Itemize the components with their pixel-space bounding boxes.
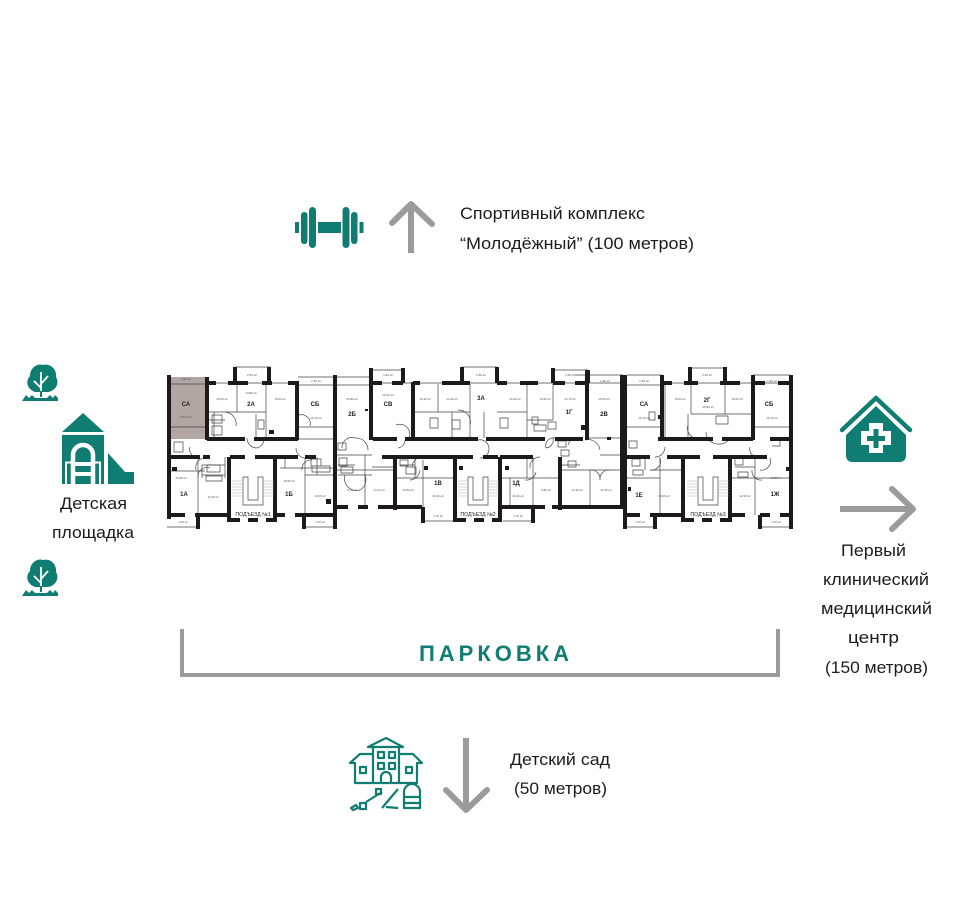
area labels: 16,10 м²	[310, 416, 322, 420]
area labels: 16,10 м²	[766, 416, 778, 420]
thick walls	[167, 367, 793, 529]
apartment labels: СВ	[384, 402, 393, 408]
area labels: 2,59 м²	[702, 373, 712, 377]
area labels: 16,40 м²	[509, 397, 521, 401]
area labels: 16,40 м²	[512, 494, 524, 498]
area labels	[175, 373, 782, 524]
area labels: 11,50 м²	[739, 494, 751, 498]
area labels: 14,10 м²	[373, 488, 385, 492]
area labels: 1,60 м²	[635, 520, 645, 524]
text: kindergarten: (50 метров)	[514, 779, 607, 798]
apartment labels: 1В	[434, 481, 443, 487]
arrow: right	[840, 489, 913, 529]
area labels: 2,39 м²	[311, 379, 321, 383]
icon: kindergarten	[350, 738, 422, 810]
area labels: 16,50 м²	[175, 476, 187, 480]
area labels: 1,60 м²	[383, 373, 393, 377]
bathrooms	[174, 412, 780, 481]
area labels: 16,50 м²	[598, 397, 610, 401]
apartment labels	[180, 396, 780, 499]
area labels: 2,59 м²	[247, 373, 257, 377]
icon: playground	[62, 413, 134, 484]
area labels: 10,60 м²	[658, 494, 670, 498]
area labels: 16,00 м²	[731, 397, 743, 401]
text: kindergarten	[510, 750, 610, 798]
label: playground: площадка	[52, 523, 135, 542]
area labels: 1,90 м²	[600, 379, 610, 383]
apartment labels: 1Б	[285, 492, 294, 498]
area labels: 19,00 м²	[216, 397, 228, 401]
area labels: 1,60 м²	[771, 520, 781, 524]
area labels: 1,60 м²	[315, 520, 325, 524]
floor plan	[167, 367, 793, 529]
icon: clinic	[842, 398, 910, 462]
apartment labels: 1Е	[635, 493, 643, 499]
area labels: 1,60 м²	[178, 520, 188, 524]
label: playground: Детская	[60, 494, 127, 513]
area labels: 16,30 м²	[432, 494, 444, 498]
apartment labels: 2А	[247, 402, 256, 408]
text: sports complex: Спортивный комплекс	[460, 204, 646, 223]
stairwell 2	[458, 477, 499, 505]
icon: tree bottom	[22, 560, 58, 596]
area labels: 20,80 м²	[346, 397, 358, 401]
apartment labels: 3А	[477, 396, 486, 402]
arrow: up	[392, 204, 432, 253]
text: clinic: медицинский	[821, 599, 932, 618]
apartment labels: СА	[182, 402, 191, 408]
icon: tree top	[22, 365, 58, 401]
area labels: 16,10 м²	[638, 416, 650, 420]
entrance labels: ПОДЪЕЗД №1	[235, 512, 271, 518]
apartment labels: СА	[640, 402, 649, 408]
area labels: 11,50 м²	[600, 488, 612, 492]
entrance labels: ПОДЪЕЗД №2	[460, 512, 496, 518]
apartment labels: 1Ж	[771, 492, 780, 498]
area labels: 16,50 м²	[770, 476, 782, 480]
entrance labels: ПОДЪЕЗД №3	[690, 512, 726, 518]
area labels: 11,50 м²	[207, 495, 219, 499]
text: kindergarten: Детский сад	[510, 750, 610, 769]
arrow: down	[446, 738, 487, 810]
area labels: 10,80 м²	[245, 391, 257, 395]
thin interior lines	[167, 367, 793, 527]
area labels: 19,00 м²	[674, 397, 686, 401]
text: clinic: клинический	[823, 570, 929, 589]
area labels: 9,10 м²	[347, 488, 357, 492]
text: sports complex	[460, 204, 694, 253]
area labels: 10,80 м²	[702, 405, 714, 409]
area labels: 1,70 м²	[433, 514, 443, 518]
area labels: 2,00 м²	[181, 377, 191, 381]
area labels: 12,70 м²	[564, 397, 576, 401]
center party wall	[620, 375, 627, 529]
area labels: 16,50 м²	[283, 479, 295, 483]
stairwell 3	[687, 477, 729, 505]
apartment labels: СБ	[765, 402, 774, 408]
area labels: 13,80 м²	[402, 488, 414, 492]
apartment highlight	[171, 377, 205, 439]
area labels: 14,40 м²	[446, 397, 458, 401]
apartment labels: 1Г	[566, 410, 573, 416]
text: clinic	[821, 541, 932, 677]
label: playground	[52, 494, 135, 542]
area labels: 2,39 м²	[639, 379, 649, 383]
parking bracket	[182, 629, 778, 675]
text: clinic: центр	[848, 628, 899, 647]
apartment labels: 2Г	[704, 398, 711, 404]
area labels: 1,70 м²	[513, 514, 523, 518]
stairwell 1	[232, 477, 274, 505]
area labels: 2,59 м²	[476, 373, 486, 377]
small dark wall blocks	[172, 409, 790, 504]
area labels: 16,00 м²	[382, 393, 394, 397]
entrance labels	[235, 512, 726, 518]
apartment labels: 2В	[600, 412, 609, 418]
area labels: 14,80 м²	[539, 397, 551, 401]
icon: dumbbell	[295, 207, 364, 248]
apartment labels: 1Д	[512, 481, 521, 487]
door arcs	[190, 410, 771, 491]
area labels: 1,80 м²	[565, 373, 575, 377]
apartment labels: 2Б	[348, 412, 357, 418]
apartment labels: СБ	[311, 402, 320, 408]
area labels: 16,00 м²	[274, 397, 286, 401]
area labels: 16,70 м²	[180, 415, 192, 419]
label: parking: ПАРКОВКА	[419, 641, 569, 666]
text: clinic: (150 метров)	[825, 658, 928, 677]
area labels: 16,40 м²	[419, 397, 431, 401]
area labels: 9,80 м²	[541, 488, 551, 492]
text: sports complex: “Молодёжный” (100 метров)	[460, 234, 694, 253]
area labels: 10,60 м²	[314, 494, 326, 498]
area labels: 2,39 м²	[767, 379, 777, 383]
apartment labels: 1А	[180, 492, 189, 498]
text: clinic: Первый	[841, 541, 906, 560]
area labels: 13,30 м²	[571, 488, 583, 492]
